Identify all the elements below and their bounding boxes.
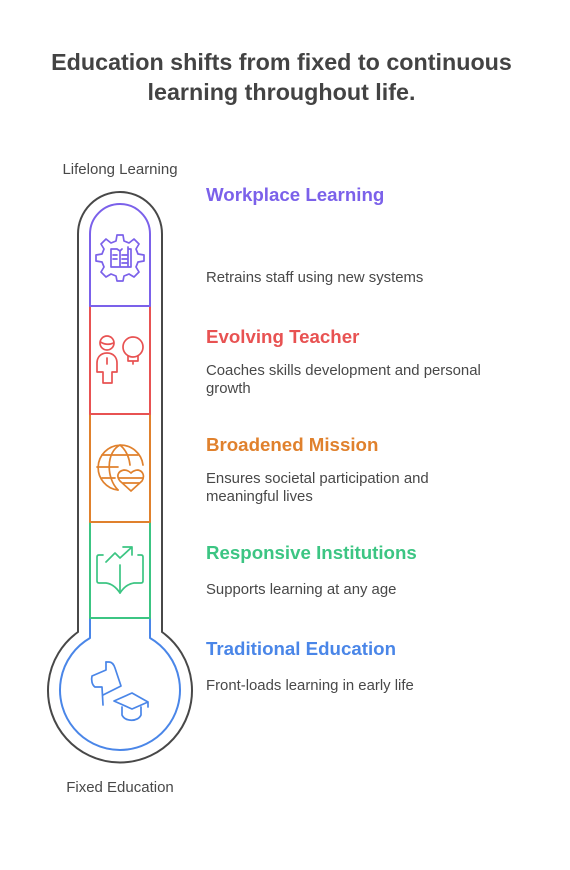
- icon: megaphone and graduation cap: [92, 662, 148, 720]
- title: Education shifts from fixed to continuous: [51, 48, 512, 74]
- text: Evolving Teacher description: Coaches skills development and personal: [206, 363, 481, 379]
- text: Broadened Mission description: Ensures societal participation and: [206, 471, 429, 487]
- text: Responsive Institutions description: Supports learning at any age: [206, 582, 396, 598]
- segment: evolving teacher: [90, 306, 150, 414]
- segment: workplace learning: [90, 204, 150, 306]
- heading: Workplace Learning: Workplace Learning: [206, 184, 384, 205]
- text: Broadened Mission description: meaningful lives: [206, 489, 313, 505]
- text: Evolving Teacher description: growth: [206, 381, 251, 397]
- title: learning throughout life.: [148, 78, 415, 104]
- text: Traditional Education description: Front-loads learning in early life: [206, 678, 414, 694]
- icon: globe with heart: [97, 445, 143, 491]
- segment: responsive institutions: [90, 522, 150, 618]
- heading: Traditional Education: Traditional Education: [206, 638, 396, 659]
- text: Evolving Teacher description: [206, 363, 481, 397]
- segment: broadened mission: [90, 414, 150, 522]
- icon: open book with growth arrow: [97, 547, 143, 593]
- bottom label: Fixed Education: Fixed Education: [66, 779, 174, 796]
- heading: Responsive Institutions: Responsive Institutions: [206, 542, 417, 563]
- top label: Lifelong Learning: Lifelong Learning: [62, 161, 178, 178]
- icon: teacher and light bulb: [97, 336, 143, 383]
- icon: gear with book: [96, 235, 144, 281]
- segment: traditional education bulb: [60, 618, 180, 750]
- title: [51, 48, 512, 105]
- thermometer outline: [48, 192, 192, 762]
- text: Workplace Learning description: Retrains staff using new systems: [206, 270, 423, 286]
- heading: Evolving Teacher: Evolving Teacher: [206, 326, 359, 347]
- text: Broadened Mission description: [206, 471, 429, 505]
- heading: Broadened Mission: Broadened Mission: [206, 434, 378, 455]
